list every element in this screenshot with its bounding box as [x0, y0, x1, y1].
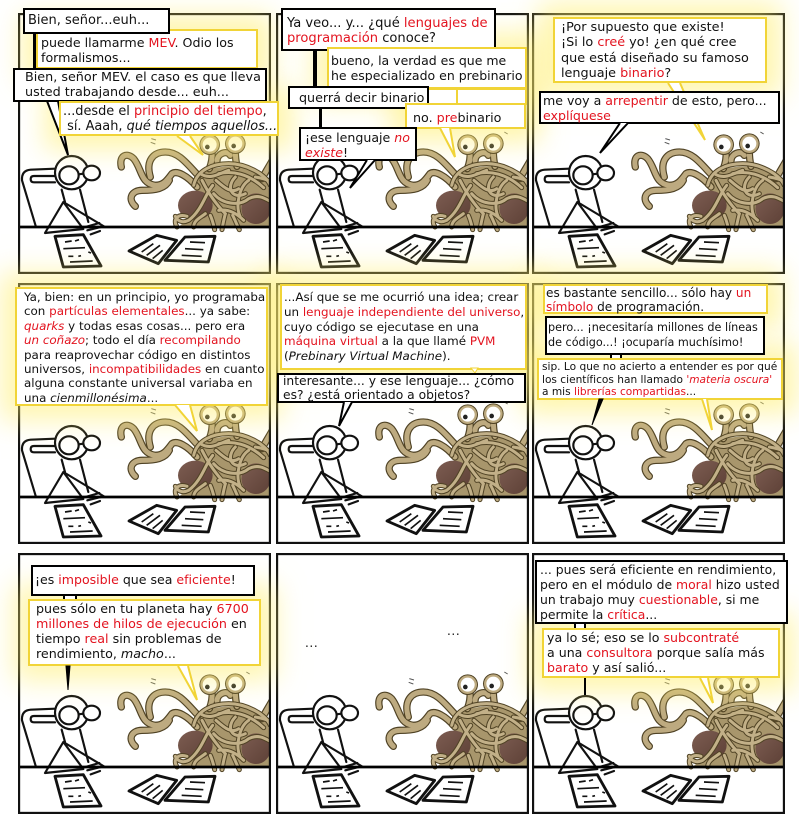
panel 5 black bubble: objetos: es? ¿está orientado a objetos?: [283, 388, 470, 402]
panel 5 yellow bubble: lenguaje independiente: [280, 284, 527, 370]
panel 3 yellow bubble: creé: lenguaje binario?: [561, 66, 671, 81]
panel 3 yellow bubble: creé: ¡Si lo creé yo! ¿en qué cree: [561, 35, 737, 50]
panel 1 monster tail: [176, 136, 204, 156]
panel 2 yellow connector: [425, 88, 527, 105]
panel 8 monster silence: ...: [447, 624, 460, 638]
panel 2 yellow bubble: prebinario: bueno, la verdad es que me: [331, 53, 506, 68]
panel 2 black bubble: binario: [288, 86, 429, 109]
panel 5 black bubble: objetos: interesante... y ese lenguaje... ¿cómo: [283, 374, 514, 388]
panel 1 man tail: [46, 102, 69, 156]
panel 6 yellow bubble: un símbolo: símbolo de programación.: [546, 300, 704, 314]
panel 9 black bubble: moral: [535, 560, 788, 624]
panel 5 yellow bubble: lenguaje independiente: ...Así que se me ocurrió una idea; crear: [284, 290, 518, 304]
panel 5 yellow bubble: lenguaje independiente: máquina virtual a la que llamé PVM: [284, 334, 495, 348]
panel 4 monster tail: [174, 405, 198, 432]
panel 6: [532, 283, 785, 544]
panel 2 black bubble: lenguajes: Ya veo... y... ¿qué lenguajes de: [287, 16, 488, 31]
panel 1: [18, 13, 271, 274]
panel 2 yellow bubble: prebinario: [327, 47, 527, 89]
panel 1 yellow bubble: principio del tiempo: ...desde el principio del tiempo,: [63, 104, 267, 119]
panel 7 black stub: [63, 593, 77, 601]
panel 1 yellow bubble: MEV: formalismos...: [41, 50, 131, 65]
panel 4 yellow bubble: partículas elementales: una cienmillonésima...: [24, 391, 158, 405]
panel 5 monster tail: [470, 368, 479, 373]
panel 7 black bubble: imposible: [31, 565, 255, 596]
panel 1 yellow bubble: principio del tiempo: [59, 101, 279, 136]
panel 6 yellow bubble: materia oscura: a mis librerías compartidas...: [542, 386, 696, 398]
panel 7 man tail: [65, 666, 71, 690]
panel 7 black bubble: imposible: ¡es imposible que sea eficiente!: [35, 572, 236, 587]
panel 9 yellow bubble: subcontraté: [542, 628, 780, 678]
panel 2 black bubble: no existe: [299, 127, 417, 161]
panel 3: [532, 13, 785, 274]
panel 1 black bubble: greeting: [23, 8, 170, 34]
panel 6 man tail: [592, 398, 604, 426]
panel 9 yellow bubble: subcontraté: barato y así salió...: [547, 660, 666, 675]
panel 4 yellow bubble: partículas elementales: universos, incompatibilidades en cuanto: [24, 362, 264, 376]
panel 6 black bubble: millones: de código...! ¡ocuparía muchísimo!: [548, 336, 743, 349]
panel 4 yellow bubble: partículas elementales: alguna constante universal variaba en: [24, 376, 253, 390]
panel 2 yellow bubble: no prebinario: [405, 103, 526, 129]
panel 3 black bubble: arrepentir: me voy a arrepentir de esto, pero...: [543, 93, 767, 108]
panel 6 black bubble: millones: [545, 316, 765, 355]
panel 2 yellow bubble: no prebinario: no. prebinario: [413, 110, 501, 125]
panel 8 man silence: ...: [305, 636, 318, 650]
panel 3 yellow bubble: creé: [553, 17, 767, 83]
panel 9 yellow bubble: subcontraté: a una consultora porque salía más: [547, 645, 765, 660]
panel 2 connector black: [313, 50, 317, 87]
panel 9 black bubble: moral: ... pues será eficiente en rendimiento,: [540, 562, 776, 577]
panel 6 black stub: [610, 352, 622, 360]
panel 3 black bubble: arrepentir: [539, 91, 780, 124]
panel 3 yellow bubble: creé: ¡Por supuesto que existe!: [561, 20, 725, 35]
panel 9 black bubble: moral: pero en el módulo de moral hizo usted: [540, 577, 780, 592]
panel 4 yellow bubble: partículas elementales: [15, 287, 268, 406]
panel 2 black bubble: binario: querrá decir binario: [299, 90, 424, 105]
panel 4 yellow bubble: partículas elementales: con partículas elementales... ya sabe:: [24, 304, 250, 318]
panel 1 black bubble: señor MEV: Bien, señor MEV. el caso es que lleva: [25, 70, 261, 85]
panel 9 yellow bubble: subcontraté: ya lo sé; eso se lo subcontraté: [547, 630, 739, 645]
panel 5 yellow bubble: lenguaje independiente: un lenguaje independiente del universo,: [284, 305, 524, 319]
panel 6 yellow bubble: un símbolo: [543, 284, 768, 314]
panel 2 yellow bubble: prebinario: he especializado en prebinario: [331, 68, 522, 83]
panel 7 yellow bubble: 6700 millones: tiempo real sin problemas de: [36, 631, 222, 646]
panel 2 black bubble: no existe: existe!: [305, 145, 348, 160]
panel 6 yellow bubble: un símbolo: es bastante sencillo... sólo hay un: [546, 286, 751, 300]
panel 9: [532, 553, 785, 814]
panel 1 connector: [33, 33, 36, 69]
panel 6 yellow bubble: materia oscura: los científicos han llamado 'materia oscura': [542, 374, 772, 386]
panel 5 black bubble: objetos: [277, 373, 526, 403]
panel 7 monster tail: [177, 666, 198, 700]
panel 2 monster tail: [440, 128, 456, 158]
panel 6 yellow bubble: materia oscura: [537, 358, 783, 400]
panel 9 man tail: [584, 678, 586, 695]
panel 5 yellow bubble: lenguaje independiente: (Prebinary Virtual Machine).: [284, 349, 450, 363]
panel 2: [276, 13, 529, 274]
panel 4 yellow bubble: partículas elementales: quarks y todas esas cosas... pero era: [24, 319, 245, 333]
panel 6 black bubble: millones: pero... ¡necesitaría millones de líneas: [548, 321, 758, 334]
panel 6 yellow bubble: materia oscura: sip. Lo que no acierto a entender es por qué: [542, 361, 777, 373]
panel 1 yellow bubble: principio del tiempo: sí. Aaah, qué tiempos aquellos...: [67, 119, 277, 134]
panel 9 monster tail: [699, 678, 714, 704]
panel 9 black stub: [574, 621, 586, 630]
panel 9 black bubble: moral: un trabajo muy cuestionable, si me: [540, 592, 759, 607]
panel 7 yellow bubble: 6700 millones: rendimiento, macho...: [36, 646, 176, 661]
panel 1 black bubble: señor MEV: [13, 68, 267, 102]
panel 5: [276, 283, 529, 544]
panel 2 black bubble: lenguajes: [281, 8, 496, 51]
panel 4 yellow bubble: partículas elementales: un coñazo; todo el día recompilando: [24, 333, 241, 347]
panel 2 connector black lower: [319, 108, 322, 128]
panel 3 monster tail: [667, 83, 706, 140]
panel 7 yellow bubble: 6700 millones: pues sólo en tu planeta hay 6700: [36, 601, 249, 616]
panel 4: [18, 283, 271, 544]
panel 8: [276, 553, 529, 814]
panel 6 monster tail: [701, 399, 713, 430]
panel 3 black bubble: arrepentir: explíquese: [543, 108, 611, 123]
panel 1 yellow bubble: MEV: puede llamarme MEV. Odio los: [41, 35, 234, 50]
panel 4 yellow bubble: partículas elementales: Ya, bien: en un principio, yo programaba: [24, 290, 265, 304]
panel 2 black bubble: lenguajes: programación conoce?: [287, 31, 436, 46]
panel 9 black bubble: moral: permite la crítica...: [540, 607, 657, 622]
panel 5 yellow bubble: lenguaje independiente: cuyo código se ejecutase en una: [284, 320, 479, 334]
panel 3 man tail: [599, 123, 628, 154]
panel 4 yellow bubble: partículas elementales: para reaprovechar código en distintos: [24, 348, 250, 362]
panel 5 man tail: [338, 402, 352, 426]
panel 3 yellow bubble: creé: que está diseñado su famoso: [561, 51, 749, 66]
panel 1 yellow bubble: MEV: [36, 29, 258, 69]
panel 7 yellow bubble: 6700 millones: millones de hilos de ejecución en: [36, 616, 247, 631]
panel 1 black bubble: señor MEV: usted trabajando desde... euh...: [25, 85, 229, 100]
panel 1 black bubble: greeting: Bien, señor...euh...: [28, 13, 149, 28]
panel 7: [18, 553, 271, 814]
panel 7 yellow bubble: 6700 millones: [28, 599, 261, 666]
panel 2 black bubble: no existe: ¡ese lenguaje no: [305, 130, 410, 145]
panel 2 man tail: [349, 160, 376, 189]
